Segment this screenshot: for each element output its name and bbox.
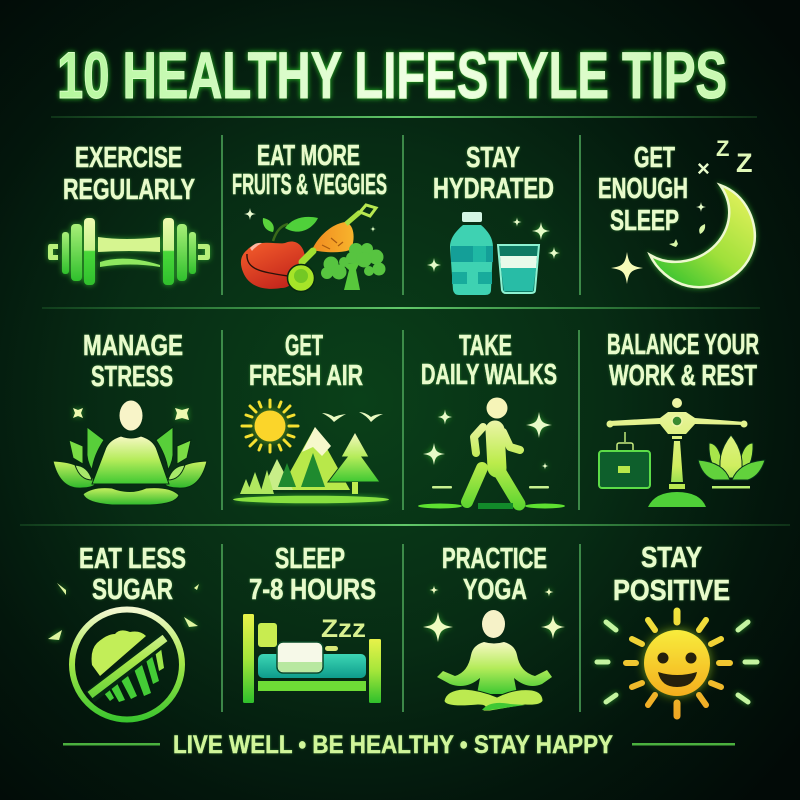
heading: exercise regularly: EXERCISE bbox=[75, 142, 182, 174]
heading: eat less sugar bbox=[79, 543, 186, 606]
heading: manage stress bbox=[83, 330, 183, 393]
heading: sleep 7-8 hours bbox=[249, 543, 376, 606]
heading: practice yoga: PRACTICE bbox=[442, 543, 547, 575]
icon: crescent moon: Z bbox=[716, 136, 729, 161]
icon: bed with zzz: Zzz bbox=[321, 615, 366, 643]
heading: sleep 7-8 hours: 7-8 HOURS bbox=[249, 574, 376, 606]
panel: eat less sugar bbox=[48, 543, 199, 720]
heading: practice yoga bbox=[442, 543, 547, 606]
heading: practice yoga: YOGA bbox=[463, 574, 527, 606]
panel: sleep 7-8 hours bbox=[243, 543, 381, 703]
panel: get fresh air bbox=[233, 330, 389, 503]
icon: dumbbell bbox=[48, 218, 210, 285]
panel: balance your work and rest bbox=[599, 329, 765, 507]
heading: eat more fruits and veggies: FRUITS & VEGGIES bbox=[232, 169, 387, 201]
icon: walking person bbox=[418, 398, 565, 509]
heading: take daily walks: TAKE bbox=[459, 330, 512, 362]
heading: stay positive: STAY bbox=[641, 542, 702, 574]
heading: get fresh air: FRESH AIR bbox=[249, 360, 363, 392]
panel: stay positive bbox=[597, 542, 757, 716]
icon: water bottle and glass bbox=[427, 212, 560, 295]
heading: manage stress: STRESS bbox=[91, 361, 173, 393]
heading: get enough sleep: ENOUGH bbox=[598, 173, 688, 205]
icon: smiling sun bbox=[597, 611, 757, 716]
heading: get fresh air bbox=[249, 330, 363, 392]
heading: stay hydrated: HYDRATED bbox=[433, 173, 554, 205]
heading: stay hydrated: STAY bbox=[466, 142, 520, 174]
icon: crescent moon bbox=[611, 136, 755, 287]
icon: fruits and vegetables bbox=[241, 205, 386, 292]
heading: manage stress: MANAGE bbox=[83, 330, 183, 362]
panel: practice yoga bbox=[423, 543, 565, 711]
icon: crescent moon: × bbox=[697, 156, 710, 181]
heading: eat less sugar: SUGAR bbox=[92, 574, 173, 606]
heading: eat less sugar: EAT LESS bbox=[79, 543, 186, 575]
icon: balance scale bbox=[599, 398, 765, 507]
heading: get enough sleep: SLEEP bbox=[610, 205, 679, 237]
icon: sun over mountains and trees bbox=[233, 400, 389, 503]
heading: take daily walks bbox=[421, 330, 557, 391]
heading: take daily walks: DAILY WALKS bbox=[421, 359, 557, 391]
heading: get fresh air: GET bbox=[285, 330, 323, 362]
heading: eat more fruits and veggies: EAT MORE bbox=[257, 140, 360, 172]
heading: exercise regularly: REGULARLY bbox=[63, 174, 195, 206]
panel: eat more fruits and veggies bbox=[232, 140, 387, 292]
heading: get enough sleep: GET bbox=[634, 142, 675, 174]
heading: sleep 7-8 hours: SLEEP bbox=[275, 543, 345, 575]
panel: exercise regularly bbox=[48, 142, 210, 285]
icon: bed with zzz bbox=[243, 614, 381, 703]
heading: stay positive bbox=[613, 542, 730, 607]
icon: yoga figure bbox=[423, 586, 565, 711]
icon: crescent moon: Z bbox=[736, 148, 752, 178]
heading: get enough sleep bbox=[598, 142, 688, 237]
heading: eat more fruits and veggies bbox=[232, 140, 387, 201]
icon: no sugar sign bbox=[48, 583, 199, 720]
panel: take daily walks bbox=[418, 330, 565, 509]
heading: exercise regularly bbox=[63, 142, 195, 206]
panel: stay hydrated bbox=[427, 142, 560, 295]
icon: meditating figure with leaves bbox=[53, 400, 207, 505]
heading: stay positive: POSITIVE bbox=[613, 575, 730, 607]
heading: balance your work and rest bbox=[607, 329, 759, 392]
panel: get enough sleep bbox=[598, 136, 755, 287]
tagline: LIVE WELL • BE HEALTHY • STAY HAPPY bbox=[173, 731, 613, 759]
panel: manage stress bbox=[53, 330, 207, 505]
heading: stay hydrated bbox=[433, 142, 554, 205]
